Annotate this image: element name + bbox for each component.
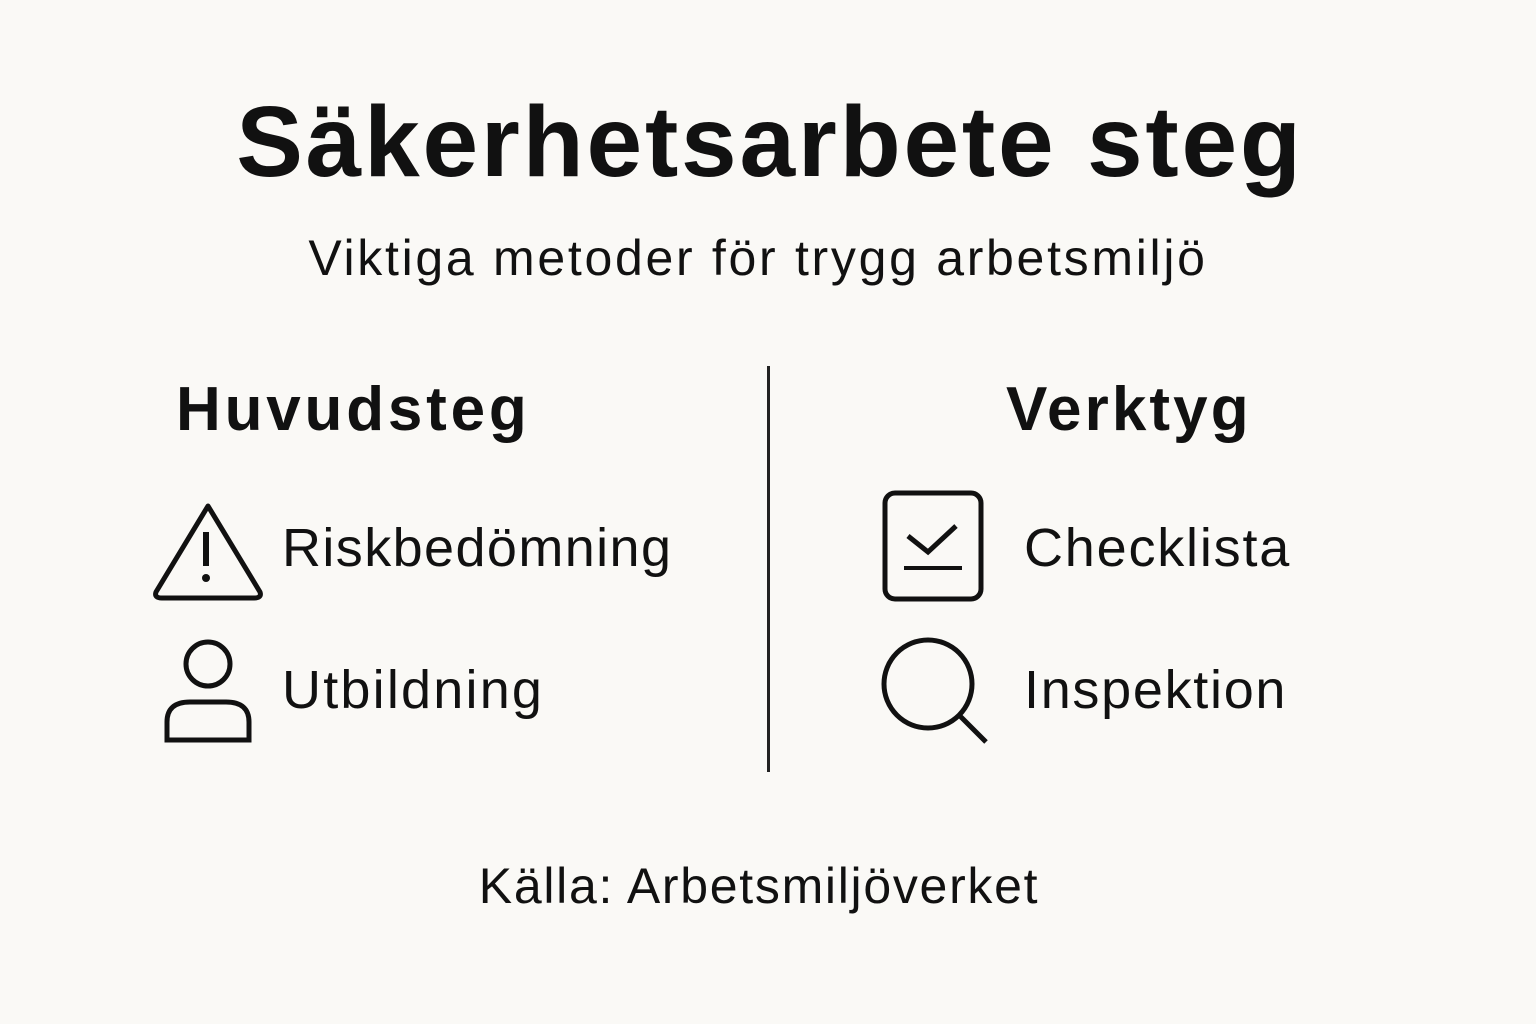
divider: [767, 366, 770, 772]
subtitle: Viktiga metoder för trygg arbetsmiljö: [308, 230, 1208, 286]
icon: warning: [153, 504, 263, 600]
icon: person: [164, 640, 252, 742]
text: Riskbedömning: Riskbedömning: [282, 518, 672, 578]
icon: magnifier: [882, 638, 988, 744]
icon: checklist: [882, 490, 984, 602]
title: Säkerhetsarbete steg: [236, 86, 1304, 198]
text: Inspektion: Inspektion: [1024, 660, 1287, 720]
heading: Huvudsteg: Huvudsteg: [176, 375, 531, 444]
source: Källa: Arbetsmiljöverket: [479, 858, 1039, 914]
text: Utbildning: Utbildning: [282, 660, 544, 720]
text: Checklista: Checklista: [1024, 518, 1291, 578]
heading: Verktyg: Verktyg: [1006, 375, 1252, 444]
